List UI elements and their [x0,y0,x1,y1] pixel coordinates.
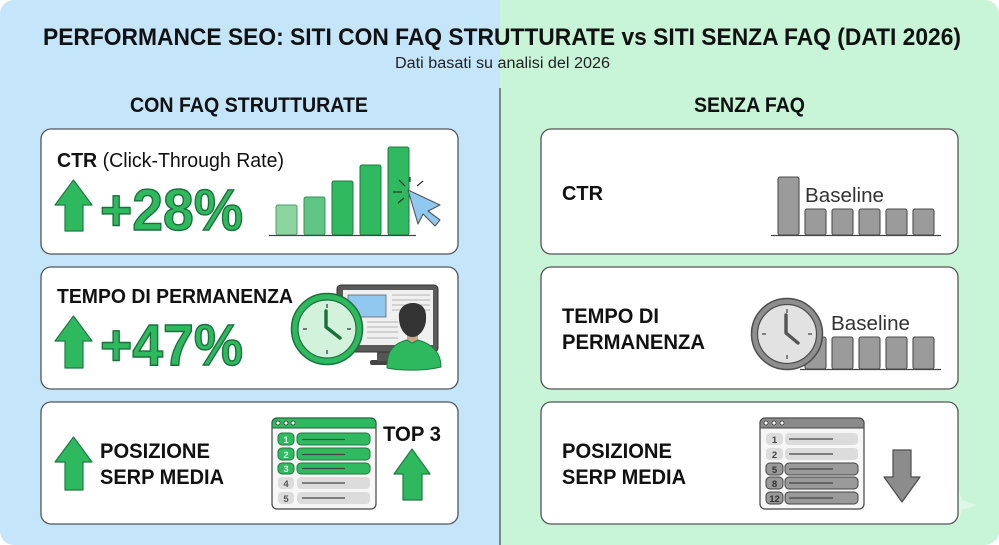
SERP label: POSIZIONE [562,440,672,463]
SERP label: POSIZIONE [100,440,210,463]
icon: SERP list top 3: 1 [283,435,289,446]
icon: SERP list top 3: 3 [283,464,289,475]
heading: con FAQ: CON FAQ STRUTTURATE [130,94,368,117]
panel: CTR senza FAQ [541,129,958,254]
icon: SERP list low: 1 [772,435,778,446]
bar chart: flat CTR [771,177,941,236]
icon: SERP list low: 8 [772,479,777,490]
value: +28%: +28% [100,178,243,243]
tempo label: PERMANENZA [562,331,705,354]
value: +47%: +47% [100,313,243,378]
panel: tempo senza FAQ [541,267,958,389]
icon: up arrow top 3 [394,449,430,500]
baseline label: Baseline [805,184,884,207]
icon: up arrow [55,316,92,368]
icon: gray clock [752,298,822,370]
icon: SERP list low: 2 [772,450,777,461]
icon: SERP list top 3 [272,418,376,509]
icon: green clock [292,294,362,364]
SERP label: SERP MEDIA [562,466,686,489]
icon: SERP list low: 5 [772,465,778,476]
panel: tempo con FAQ [41,267,458,389]
icon: monitor [337,285,438,365]
icon: down arrow [884,450,920,502]
center divider [499,88,501,545]
icon: SERP list low [760,418,864,509]
SERP label: SERP MEDIA [100,466,224,489]
bar chart: flat time [800,337,941,370]
panel: SERP senza FAQ [541,402,958,524]
icon: SERP list low: 12 [769,494,780,505]
bar chart: rising CTR [269,147,416,236]
icon: up arrow [55,180,92,231]
tempo label: TEMPO DI PERMANENZA [57,286,293,308]
tempo label: TEMPO DI [562,305,659,328]
baseline label: Baseline [831,312,910,335]
icon: up arrow [55,437,92,490]
heading: senza FAQ: SENZA FAQ [694,94,805,117]
icon: SERP list top 3: 2 [283,450,289,461]
icon: SERP list top 3: 5 [283,494,289,505]
panel: SERP con FAQ [41,402,458,524]
title: PERFORMANCE SEO: SITI CON FAQ STRUTTURATE vs SITI SENZA FAQ (DATI 2026) [43,24,961,51]
CTR label: CTR [562,182,603,205]
icon: SERP list top 3: 4 [283,479,289,490]
icon: click cursor [393,177,440,226]
CTR label: CTR (Click-Through Rate) [57,150,284,172]
icon: person [387,303,441,370]
TOP 3 label: TOP 3 [383,423,441,446]
subtitle: Dati basati su analisi del 2026 [395,55,610,72]
panel: CTR con FAQ [41,129,458,254]
